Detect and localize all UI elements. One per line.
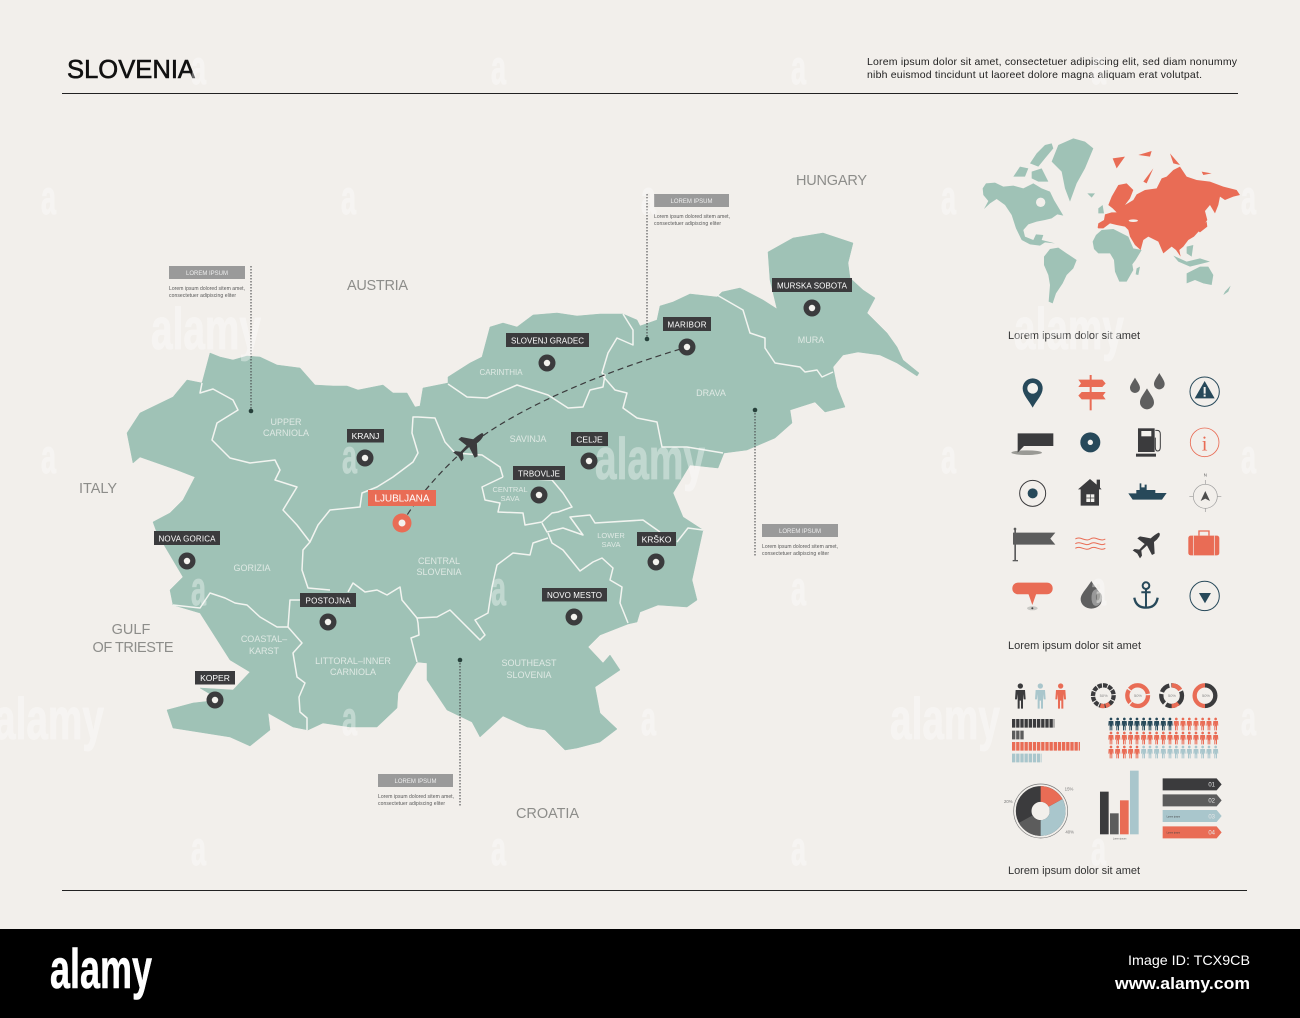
stock watermarks: a (641, 693, 656, 746)
icon: speech bubble (1011, 433, 1053, 455)
neighbouring country labels: OF TRIESTE (92, 640, 174, 656)
horizontal bars (1012, 723, 1080, 758)
icon: map marker (1012, 583, 1053, 610)
region labels (233, 335, 824, 680)
callout: right: Lorem ipsum dolored sitem amet, (762, 544, 838, 550)
numbered arrows (1163, 778, 1222, 838)
stock watermarks: a (791, 823, 806, 876)
Eurasia highlighted (1098, 151, 1240, 257)
neighbouring country labels: GULF (112, 622, 150, 638)
stock watermarks: a (342, 431, 357, 484)
city label: Novo Mesto: NOVO MESTO (547, 591, 602, 600)
neighbouring country labels: CROATIA (516, 806, 579, 822)
city label: Trbovlje: TRBOVLJE (518, 469, 560, 478)
city label: Koper: KOPER (200, 673, 230, 683)
world map caption: Lorem ipsum dolor sit amet (1008, 330, 1140, 342)
flight route (402, 347, 687, 523)
icon: radio target (1020, 480, 1046, 506)
city label: Celje: CELJE (576, 434, 603, 444)
numbered arrows: 02 (1208, 799, 1216, 805)
stock watermarks: a (1091, 42, 1106, 95)
icon set caption: Lorem ipsum dolor sit amet (1008, 640, 1141, 652)
stock footer band: alamy (50, 937, 152, 1000)
callout: upper left (169, 266, 253, 413)
icon: info (1190, 428, 1219, 457)
column chart (1100, 771, 1139, 840)
stock watermarks: a (641, 172, 656, 225)
stock watermarks: a (191, 42, 206, 95)
callout: top centre: Lorem ipsum dolored sitem amet, (654, 214, 730, 220)
icon set (1011, 373, 1222, 611)
donut chart: 40% (1065, 830, 1074, 835)
stock watermarks (0, 42, 1256, 876)
icon: airplane (1133, 533, 1160, 558)
neighbouring country labels: ITALY (79, 481, 117, 497)
infographic elements: 50% (1100, 693, 1108, 698)
callout: bottom: Lorem ipsum dolored sitem amet, (378, 794, 454, 800)
icon: waves (1075, 538, 1105, 549)
numbered arrows: 03 (1208, 814, 1216, 820)
stock watermarks: alamy (595, 427, 705, 492)
region labels: LITTORAL–INNER (315, 656, 391, 666)
city label: Koper (195, 671, 235, 684)
region labels: SAVA (602, 540, 620, 549)
region labels: KARST (249, 646, 280, 656)
icon: flag (1013, 528, 1055, 561)
city label: Krsko (637, 532, 676, 546)
numbered arrows: Lorem ipsum (1167, 831, 1180, 834)
region labels: UPPER (270, 417, 302, 427)
people pictogram rows (1108, 718, 1218, 758)
stock watermarks: a (41, 431, 56, 484)
callout: bottom (378, 658, 462, 807)
numbered arrows: Lorem ipsum (1167, 815, 1180, 818)
icon: water drop (1081, 581, 1102, 609)
infographic elements (1004, 683, 1222, 840)
city label: Murska Sobota (772, 278, 852, 292)
region labels: DRAVA (696, 388, 726, 398)
city label: Celje (571, 432, 608, 446)
region labels: CARNIOLA (330, 667, 376, 677)
city label: Krsko: KRŠKO (642, 534, 672, 544)
region labels: CENTRAL (492, 485, 528, 494)
region labels: LOWER (597, 531, 625, 540)
region borders (173, 295, 833, 730)
stock watermarks: a (491, 42, 506, 95)
stock watermarks: a (191, 563, 206, 616)
callout: bottom: consectetuer adipiscing eliter (378, 801, 445, 807)
stock watermarks: a (41, 172, 56, 225)
stock watermarks: alamy (151, 297, 261, 362)
city label: Maribor (663, 317, 711, 331)
icon: target disc (1080, 432, 1100, 452)
callout: upper left: Lorem ipsum dolored sitem amet, (169, 286, 245, 292)
icon: map pin (1023, 378, 1043, 408)
city label: Postojna (300, 593, 356, 607)
region labels: GORIZIA (233, 563, 271, 573)
infographic elements: 50% (1134, 693, 1142, 698)
ring charts (1093, 685, 1215, 706)
stock watermarks: a (191, 823, 206, 876)
people icons (1015, 683, 1066, 709)
city label: Kranj: KRANJ (352, 431, 379, 441)
stock watermarks: a (341, 172, 356, 225)
region labels: MURA (798, 335, 824, 345)
callout: top centre: consectetuer adipiscing eliter (654, 221, 721, 227)
stock footer band (0, 929, 1300, 1018)
header description: Lorem ipsum dolor sit amet, consectetuer adipiscing elit, sed diam nonummy (867, 56, 1238, 68)
callout: right (753, 408, 838, 557)
callout: bottom: LOREM IPSUM (394, 779, 437, 785)
country outline (127, 233, 919, 750)
neighbouring country labels (79, 173, 867, 822)
donut chart: 20% (1004, 799, 1013, 804)
infographic elements: 50% (1168, 693, 1176, 698)
callout: right: consectetuer adipiscing eliter (762, 551, 829, 557)
donut chart (1004, 784, 1074, 838)
region labels: COASTAL– (241, 634, 287, 644)
stock watermarks: a (491, 563, 506, 616)
column chart: Lorem ipsum (1113, 837, 1126, 840)
icon: down arrow (1190, 581, 1219, 611)
airplane icon (453, 433, 483, 461)
icon: ship (1128, 483, 1167, 500)
region labels: CARINTHIA (479, 368, 523, 377)
stock watermarks: a (941, 172, 956, 225)
callout: upper left: LOREM IPSUM (186, 271, 228, 277)
capital label: Ljubljana (368, 490, 436, 506)
region labels: SLOVENIA (416, 567, 462, 577)
callout: upper left: consectetuer adipiscing eliter (169, 293, 236, 299)
neighbouring country labels: AUSTRIA (347, 278, 408, 294)
capital label: Ljubljana: LJUBLJANA (374, 494, 430, 504)
icon: fuel pump (1136, 428, 1160, 457)
numbered arrows: 04 (1208, 831, 1216, 837)
icon: house (1078, 479, 1102, 506)
city label: Slovenj Gradec: SLOVENJ GRADEC (511, 336, 584, 345)
world map (983, 138, 1240, 303)
region labels: CARNIOLA (263, 428, 309, 438)
region labels: CENTRAL (418, 556, 460, 566)
stock watermarks: a (1091, 563, 1106, 616)
icon: warning (1190, 377, 1219, 406)
stock watermarks: alamy (890, 687, 1000, 752)
city label: Slovenj Gradec (506, 333, 589, 347)
Americas, Greenland, Africa, Australia (983, 138, 1231, 303)
callout: right: LOREM IPSUM (779, 529, 821, 535)
region labels: SAVA (501, 494, 519, 503)
region labels: SLOVENIA (506, 670, 552, 680)
stock watermarks: a (1241, 693, 1256, 746)
city label: Trbovlje (513, 466, 565, 480)
icon: drops (1130, 373, 1165, 409)
stock watermarks: a (1241, 431, 1256, 484)
city label: Novo Mesto (542, 588, 607, 602)
icon: compass (1189, 473, 1222, 513)
stock watermarks: alamy (1014, 297, 1124, 362)
icon: compass: N (1204, 473, 1207, 478)
city pins (178, 300, 820, 708)
region labels: SOUTHEAST (501, 658, 557, 668)
numbered arrows: 01 (1208, 783, 1216, 789)
icon: suitcase (1188, 531, 1219, 555)
title: SLOVENIA (67, 54, 196, 84)
icon: signpost (1078, 375, 1106, 410)
stock watermarks: a (1241, 172, 1256, 225)
header description: nibh euismod tincidunt ut laoreet dolore magna aliquam erat volutpat. (867, 69, 1202, 81)
stock watermarks: a (791, 563, 806, 616)
infographic caption: Lorem ipsum dolor sit amet (1008, 865, 1140, 877)
city label: Murska Sobota: MURSKA SOBOTA (777, 281, 848, 290)
stock footer band: www.alamy.com (1114, 974, 1250, 993)
region labels: SAVINJA (510, 434, 546, 444)
icon: info: i (1202, 433, 1208, 455)
stock watermarks: a (342, 693, 357, 746)
donut chart: 15% (1065, 787, 1073, 792)
header description (867, 56, 1238, 81)
infographic elements: 50% (1202, 693, 1210, 698)
map of Slovenia (127, 233, 919, 750)
callout: top centre (645, 194, 730, 341)
neighbouring country labels: HUNGARY (796, 173, 867, 189)
icon: anchor (1134, 582, 1158, 608)
stock watermarks: a (491, 823, 506, 876)
stock watermarks: a (941, 431, 956, 484)
stock footer band: Image ID: TCX9CB (1128, 952, 1250, 968)
callout: top centre: LOREM IPSUM (670, 199, 713, 205)
city label: Postojna: POSTOJNA (306, 596, 351, 605)
city label: Nova Gorica (154, 531, 220, 545)
stock watermarks: a (1091, 823, 1106, 876)
city label: Maribor: MARIBOR (668, 320, 707, 329)
city label: Kranj (347, 429, 384, 442)
city label: Nova Gorica: NOVA GORICA (158, 534, 216, 543)
stock watermarks: a (791, 42, 806, 95)
